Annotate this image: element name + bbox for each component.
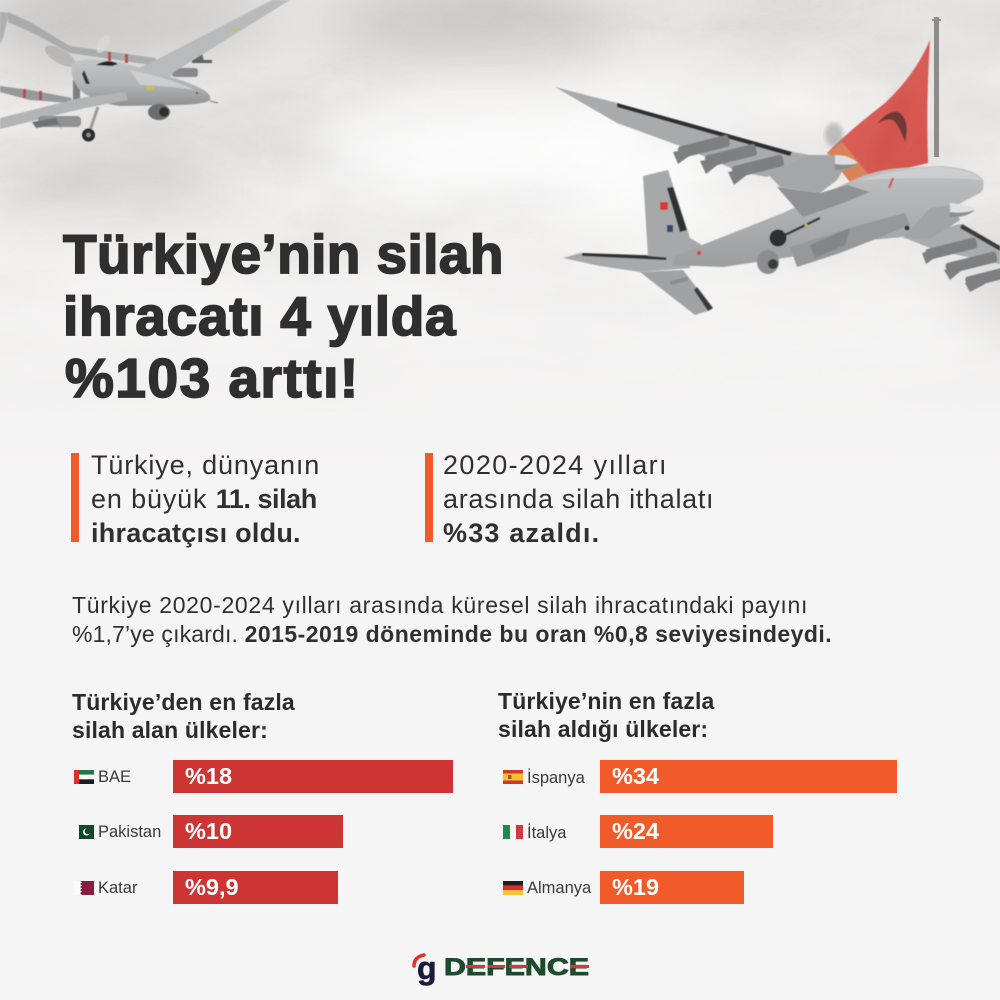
callout: imports fell <box>425 450 714 548</box>
paragraph: Türkiye 2020-2024 yılları arasında küresel silah ihracatındaki payını <box>72 592 808 618</box>
heading: export customers: Türkiye’den en fazla <box>72 689 295 715</box>
icon: flag on pole <box>823 17 941 182</box>
logo: gDefence <box>412 950 589 986</box>
title: ihracatı 4 yılda <box>63 285 456 347</box>
gimbal and gear <box>757 250 779 274</box>
row: Pakistan: Pakistan <box>98 823 161 841</box>
row: Almanya: %19 <box>612 874 659 900</box>
paragraph: %1,7’ye çıkardı. 2015-2019 döneminde bu oran %0,8 seviyesindeydi. <box>72 621 832 647</box>
row: İtalya: %24 <box>612 818 659 844</box>
title: %103 arttı! <box>65 347 360 409</box>
callout text: ihracatçısı oldu. <box>91 518 301 548</box>
heading: export customers: silah alan ülkeler: <box>72 717 268 743</box>
fuselage <box>72 60 210 106</box>
callout: 11th largest exporter <box>71 450 320 548</box>
callout text: Türkiye, dünyanın <box>91 450 320 480</box>
icon: Qatar flag <box>80 881 94 895</box>
row: Katar: Katar <box>98 879 137 897</box>
callout text: 2020-2024 yılları <box>443 450 668 480</box>
gimbal <box>148 104 170 120</box>
callout text: %33 azaldı. <box>443 518 600 548</box>
propeller <box>42 41 78 71</box>
engine nacelle right <box>903 205 960 240</box>
row: İtalya: İtalya <box>527 824 566 842</box>
bar chart: export customers <box>74 760 453 904</box>
missile clusters upper wing <box>673 134 785 185</box>
accent bar <box>71 453 79 542</box>
rear wing <box>8 12 158 66</box>
engine nacelle left <box>767 155 843 193</box>
icon: Italy flag <box>503 825 523 839</box>
icon: Akıncı drone, top right <box>556 59 1000 316</box>
tail boom left <box>0 86 72 103</box>
far wing <box>905 224 1000 264</box>
callout text <box>443 450 714 548</box>
belly pod <box>790 213 910 267</box>
row: Almanya <box>503 871 744 904</box>
wing root <box>777 185 870 217</box>
heading: import sources: Türkiye’nin en fazla <box>498 688 714 714</box>
missile clusters right <box>922 237 1000 292</box>
row: BAE <box>74 760 453 793</box>
row: Pakistan <box>79 815 343 848</box>
logo: gDefence: DEFENCE <box>444 954 589 981</box>
icon: Bayraktar drone, top left <box>0 0 290 142</box>
underwing pod <box>38 116 81 127</box>
lower wing <box>0 92 128 129</box>
row: BAE: BAE <box>98 768 131 786</box>
callout text: en büyük 11. silah <box>91 484 317 514</box>
fuselage <box>673 166 984 267</box>
gear <box>90 107 98 130</box>
pods on upper wing <box>172 68 198 77</box>
main upper wing <box>138 0 290 80</box>
stabilizer left <box>563 253 690 272</box>
main upper wing <box>555 87 810 177</box>
icon: Spain flag <box>503 770 523 784</box>
paragraph <box>72 592 832 647</box>
row: İspanya: %34 <box>612 763 659 789</box>
row: Katar <box>80 871 338 904</box>
cloud background <box>0 0 1000 352</box>
icon: Pakistan flag <box>79 825 94 839</box>
callout text <box>91 450 320 548</box>
icon: Germany flag <box>503 881 523 895</box>
row: İtalya <box>503 815 773 848</box>
title <box>62 223 504 409</box>
row: Pakistan: %10 <box>185 818 232 844</box>
icon: UAE flag <box>74 770 94 784</box>
heading: export customers <box>72 689 295 743</box>
bar chart: import sources <box>503 760 897 904</box>
row: Katar: %9,9 <box>185 874 239 900</box>
title: Türkiye’nin silah <box>63 223 504 285</box>
row: BAE: %18 <box>185 763 232 789</box>
row: Almanya: Almanya <box>527 879 591 897</box>
heading: import sources: silah aldığı ülkeler: <box>498 716 708 742</box>
tail fin <box>643 170 707 260</box>
callout text: arasında silah ithalatı <box>443 484 714 514</box>
row: İspanya <box>503 760 897 793</box>
accent bar <box>425 453 433 542</box>
stabilizer lower <box>640 270 713 315</box>
row: İspanya: İspanya <box>527 769 585 787</box>
logo: gDefence: g <box>417 950 437 986</box>
heading: import sources <box>498 688 714 742</box>
